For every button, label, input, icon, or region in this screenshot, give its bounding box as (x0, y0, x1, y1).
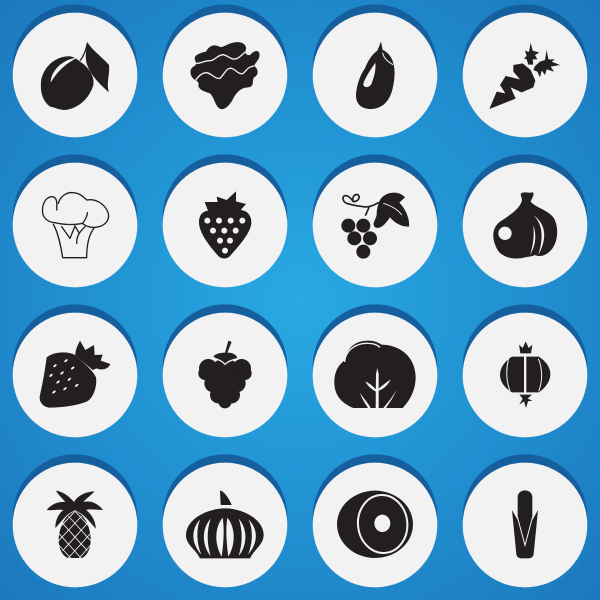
icon: coconut (337, 491, 413, 558)
panel: pumpkin (163, 454, 287, 587)
icon: strawberry with dots (199, 191, 251, 258)
panel: raspberry (163, 304, 287, 437)
panel: grapes (313, 154, 437, 287)
icon: corn (512, 490, 538, 558)
panel: plum (13, 4, 137, 137)
icon: pumpkin (186, 491, 264, 558)
panel: leafy cabbage (313, 304, 437, 437)
panel: broccoli (13, 154, 137, 287)
icon: raspberry (198, 341, 252, 408)
panel: strawberry with dots (163, 154, 287, 287)
panel: strawberry (13, 304, 137, 437)
icon: plum (41, 42, 109, 110)
panel: carrot (463, 4, 587, 137)
icon: lettuce (190, 42, 260, 109)
panel: fig (463, 154, 587, 287)
panel: eggplant (313, 4, 437, 137)
panel: onion lantern (463, 304, 587, 437)
panel: coconut (313, 454, 437, 587)
icon: fig (493, 192, 557, 258)
icon: onion lantern (500, 341, 550, 408)
panel: lettuce (163, 4, 287, 137)
icon: eggplant (356, 42, 395, 109)
icon: strawberry (40, 341, 110, 408)
icon: grapes (341, 193, 409, 259)
panel: pineapple (13, 454, 137, 587)
icon: carrot (489, 43, 560, 109)
icon: pineapple (47, 491, 103, 558)
icon: leafy cabbage (334, 341, 416, 408)
panel: corn (463, 454, 587, 587)
icon: broccoli (42, 193, 109, 258)
